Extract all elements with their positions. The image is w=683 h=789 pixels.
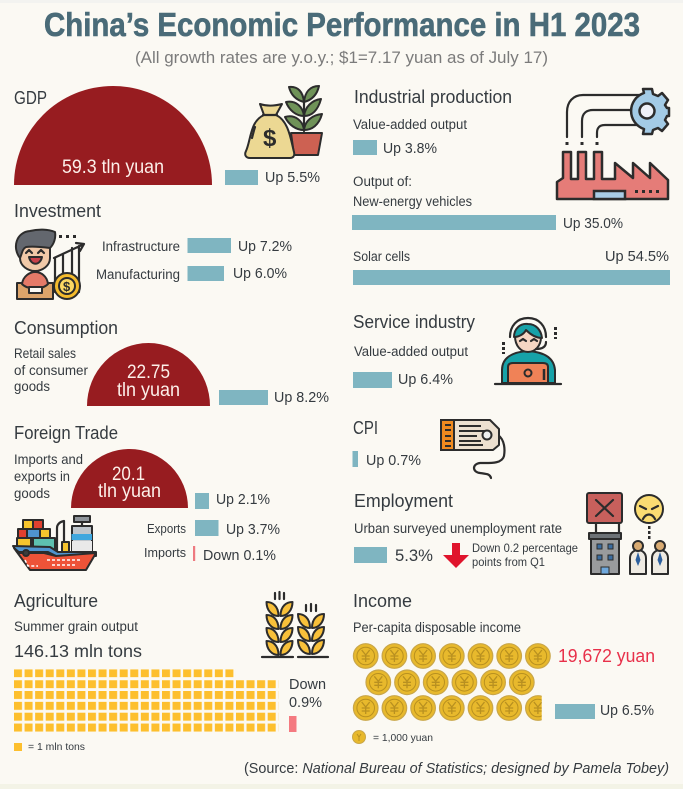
- consumption growth label: Up 8.2%: [274, 389, 329, 406]
- legend: coin: [352, 730, 433, 744]
- description: retail sales: Retail sales: [14, 345, 76, 361]
- panel: Consumption: [14, 318, 329, 406]
- value: Solar cells: Up 54.5%: [605, 248, 669, 265]
- trade semicircle: [71, 449, 188, 508]
- icon: money bag and plant: $: [263, 125, 277, 152]
- icon: wheat: [262, 592, 328, 657]
- bar: Exports: [195, 520, 218, 536]
- value: CPI: Up 0.7%: [366, 452, 421, 469]
- note: change from Q1: points from Q1: [472, 555, 545, 569]
- value: grain output: 146.13 mln tons: [14, 641, 142, 661]
- label: Per-capita disposable income: Per-capita disposable income: [353, 620, 521, 635]
- value: unemployment: 5.3%: [395, 546, 433, 565]
- trade bar: [195, 493, 209, 509]
- legend: coin: = 1,000 yuan: [373, 732, 433, 744]
- label: Value-added output: Value-added output: [353, 117, 467, 132]
- label: Output of: Output of:: [353, 174, 412, 189]
- value: Imports: Down 0.1%: [203, 547, 276, 564]
- coin chart: income: [353, 644, 550, 720]
- value: value-added output: Up 3.8%: [383, 140, 437, 157]
- bar: Imports: [193, 546, 195, 561]
- label: Imports: Imports: [144, 546, 186, 560]
- label: New-energy vehicles: New-energy vehicles: [353, 194, 472, 209]
- panel: Investment: [14, 201, 292, 299]
- description: Summer grain output: Summer grain output: [14, 619, 138, 634]
- consumption value: tln yuan: [117, 380, 180, 401]
- icon: cargo ship: [13, 516, 96, 570]
- GDP semicircle: [14, 86, 212, 185]
- subtitle: (All growth rates are y.o.y.; $1=7.17 yuan as of July 17): [135, 48, 548, 67]
- icon: investor with chart and coin: $: [63, 279, 71, 294]
- description: retail sales: goods: [14, 378, 50, 394]
- consumption bar: [219, 390, 268, 405]
- label: unemployment rate: Urban surveyed unemployment rate: [354, 521, 562, 536]
- value: Manufacturing: Up 6.0%: [233, 265, 287, 282]
- consumption semicircle: [87, 343, 210, 406]
- description: imports and exports: exports in: [14, 468, 70, 484]
- value: Exports: Up 3.7%: [226, 521, 280, 538]
- icon: red down arrow: [443, 543, 469, 568]
- value: income: 19,672 yuan: [558, 645, 655, 666]
- GDP growth bar: [225, 170, 258, 185]
- grain change label: 0.9%: [289, 694, 322, 711]
- panel: Agriculture: [14, 591, 328, 753]
- consumption value: 22.75: [127, 362, 170, 383]
- value: service output: Up 6.4%: [398, 371, 453, 388]
- bar: service output: [353, 372, 392, 388]
- bar: unemployment: [354, 547, 387, 563]
- icon: call-center agent: [495, 318, 561, 384]
- label: Value-added output: Value-added output: [354, 344, 468, 359]
- description: imports and exports: [14, 451, 83, 501]
- label: Solar cells: Solar cells: [353, 249, 410, 264]
- bar: CPI: [352, 451, 358, 467]
- note: change from Q1: Down 0.2 percentage: [472, 541, 578, 555]
- trade value: 20.1: [112, 464, 145, 485]
- panel: Industrial production: [352, 87, 670, 285]
- heading: Service industry: Service industry: [353, 312, 475, 332]
- trade value: [98, 464, 161, 502]
- heading: Agriculture: Agriculture: [14, 591, 98, 611]
- heading: CPI: CPI: [353, 418, 378, 438]
- bar: income: [555, 704, 595, 719]
- heading: Consumption: Consumption: [14, 318, 118, 338]
- panel: Income: [352, 591, 655, 744]
- label: Infrastructure: Infrastructure: [102, 239, 180, 254]
- grain change label: [289, 676, 326, 711]
- consumption value: [117, 362, 180, 401]
- bar: Infrastructure: [188, 238, 231, 253]
- trade growth label: Up 2.1%: [216, 491, 270, 508]
- GDP value: 59.3 tln yuan: [62, 157, 164, 178]
- waffle chart: grain output: [14, 669, 278, 732]
- legend: grain square: = 1 mln tons: [28, 741, 85, 753]
- grain change label: Down: [289, 676, 326, 693]
- GDP growth label: Up 5.5%: [265, 169, 320, 186]
- label: Exports: Exports: [147, 522, 186, 536]
- note: change from Q1: [472, 541, 578, 569]
- growth: income: Up 6.5%: [600, 702, 654, 719]
- value: New-energy vehicles: Up 35.0%: [563, 215, 623, 232]
- heading: Foreign Trade: Foreign Trade: [14, 423, 118, 443]
- icon: price tag: [441, 420, 504, 478]
- icon: factory with gear: [557, 89, 669, 199]
- heading: Income: Income: [353, 591, 412, 611]
- label: Manufacturing: Manufacturing: [96, 267, 180, 282]
- icon: closed office and workers: [587, 493, 668, 574]
- description: retail sales: of consumer: [14, 362, 88, 378]
- panel: CPI: [352, 418, 504, 478]
- icon: investor with chart and coin: [16, 230, 84, 299]
- panel: Employment: [354, 491, 668, 574]
- bar: Manufacturing: [188, 266, 224, 281]
- heading: Employment: Employment: [354, 491, 453, 511]
- heading: GDP: GDP: [14, 88, 47, 108]
- source line: (Source: National Bureau of Statistics; designed by Pamela Tobey): [244, 761, 669, 777]
- heading: Investment: Investment: [14, 201, 101, 221]
- bar: New-energy vehicles: [352, 215, 556, 230]
- bar: Solar cells: [353, 270, 670, 285]
- description: retail sales: [14, 345, 88, 394]
- bar: value-added output: [353, 140, 377, 155]
- panel: GDP: [14, 86, 322, 186]
- panel: Foreign Trade: [13, 423, 280, 570]
- description: imports and exports: goods: [14, 485, 50, 501]
- heading: Industrial production: Industrial production: [354, 87, 512, 107]
- icon: money bag and plant: [245, 86, 322, 158]
- trade value: tln yuan: [98, 481, 161, 502]
- grain change bar: [289, 716, 296, 732]
- description: imports and exports: Imports and: [14, 451, 83, 467]
- panel: Service industry: [353, 312, 561, 388]
- value: Infrastructure: Up 7.2%: [238, 238, 292, 255]
